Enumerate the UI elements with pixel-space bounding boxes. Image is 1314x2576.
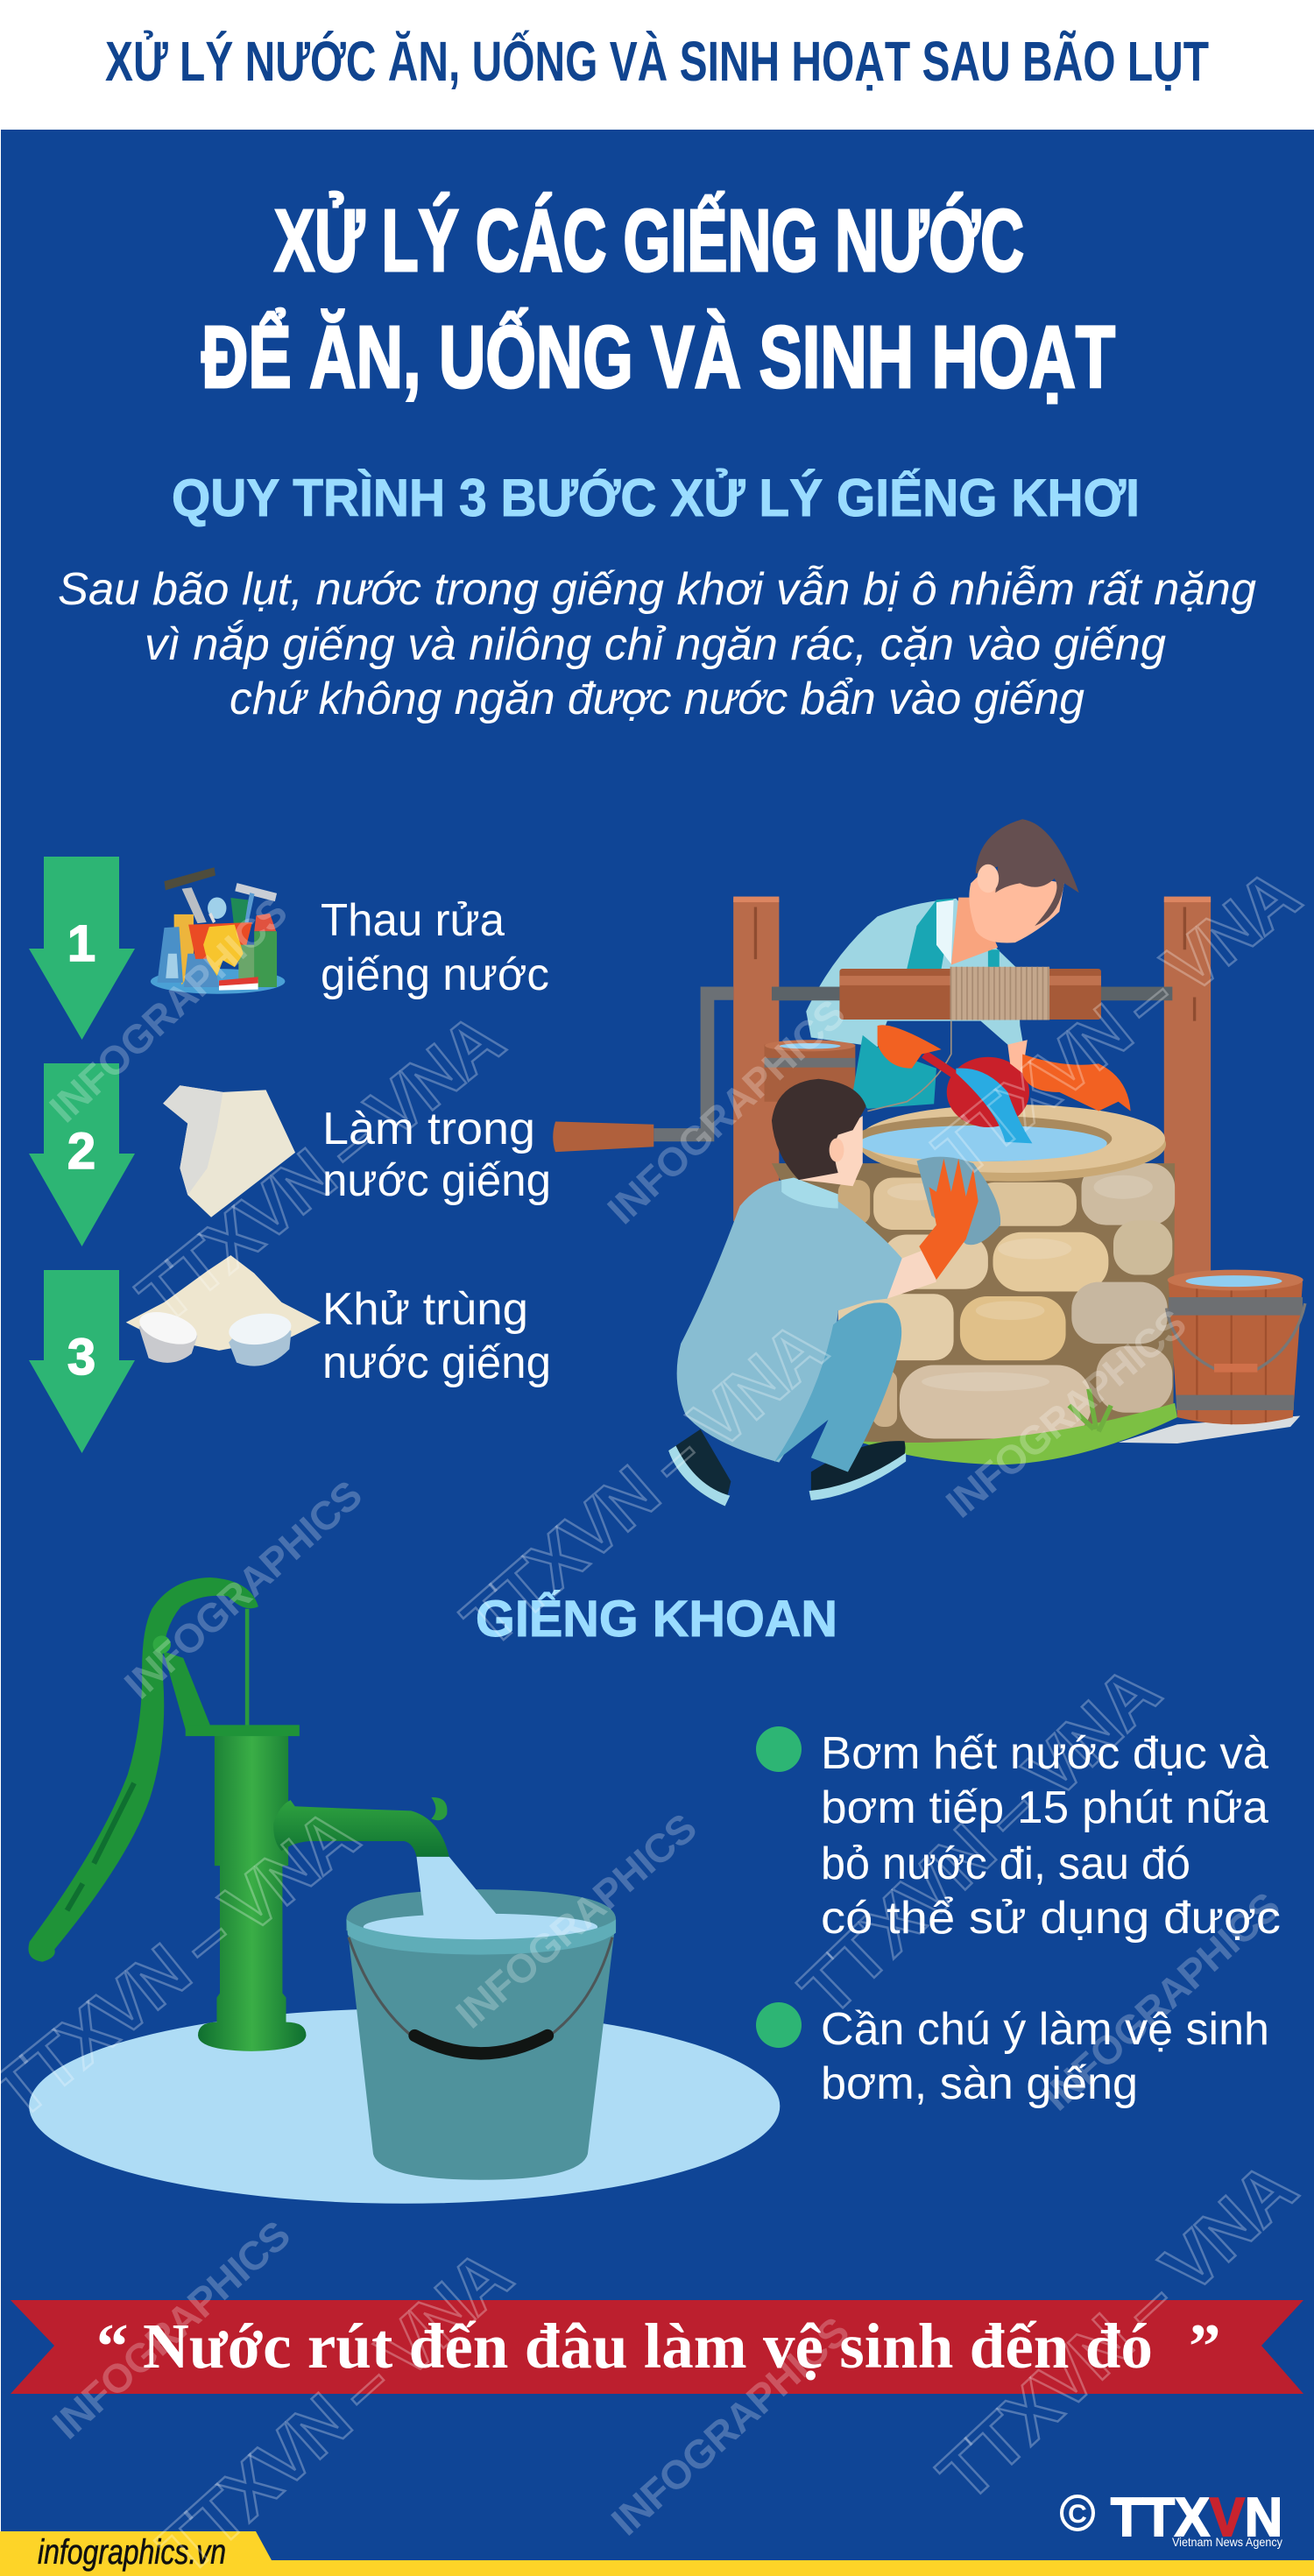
watermark: TTXVN VNA: TTXVN – VNA [922, 2146, 1312, 2516]
watermark: infographics: INFOGRAPHICS [598, 991, 854, 1232]
right bucket [1167, 1270, 1305, 1424]
watermark: infographics: INFOGRAPHICS [603, 2308, 858, 2544]
well posts [733, 897, 1211, 1283]
TTXVN logo: TTXVN [1111, 2488, 1282, 2548]
illustration: hand pump and bucket [28, 1577, 780, 2204]
bullet 2: bơm, sàn giếng [821, 2058, 1138, 2109]
step labels: Khử trùng [322, 1284, 528, 1335]
bullet 1 [756, 1726, 1281, 1944]
crank handle [553, 993, 733, 1152]
step labels: nước giếng [322, 1337, 551, 1388]
step numbers [67, 915, 95, 1386]
watermark: TTXVN VNA: TTXVN – VNA [123, 997, 519, 1339]
step labels: Làm trong [322, 1104, 535, 1154]
arrow 3 [29, 1270, 135, 1453]
watermark: TTXVN VNA: TTXVN – VNA [919, 852, 1314, 1195]
step labels [321, 895, 551, 1388]
watermark: infographics: INFOGRAPHICS [44, 2212, 299, 2447]
step numbers: 1 [67, 915, 95, 972]
well rim and water [854, 1105, 1166, 1182]
watermark: infographics: INFOGRAPHICS [937, 1300, 1195, 1527]
step labels: giếng nước [321, 949, 549, 1000]
bullet 1: Bơm hết nước đục và [821, 1728, 1268, 1779]
red ribbon banner [11, 2300, 1303, 2394]
watermarks [0, 852, 1314, 2576]
watermark: TTXVN VNA: TTXVN – VNA [784, 1649, 1176, 2031]
orange gloves [878, 1025, 1131, 1112]
icon: chlorine powder and tablets [126, 1255, 321, 1366]
ladle with pouring water [924, 1055, 1032, 1143]
arrow 2 [29, 1063, 135, 1246]
watermark: infographics [40, 889, 1289, 2544]
watermark: infographics: INFOGRAPHICS [116, 1471, 371, 1707]
watermark: infographics: INFOGRAPHICS [447, 1804, 705, 2037]
well rope [867, 1021, 951, 1112]
well stones [772, 1163, 1175, 1444]
bucket water [364, 1914, 597, 1940]
illustration: people cleaning a dug well [553, 819, 1305, 1507]
pump column [186, 1725, 306, 2051]
back bucket [765, 1040, 855, 1102]
bullet 2: Cần chú ý làm vệ sinh [821, 2004, 1269, 2055]
TTXVN logo: Vietnam News Agency [1172, 2535, 1282, 2549]
icon: cleaning supplies [151, 867, 285, 994]
man scrubbing the well [668, 1079, 1000, 1507]
watermark: infographics: INFOGRAPHICS [40, 889, 296, 1131]
man at the crank [806, 819, 1079, 1109]
bullet 1: bơm tiếp 15 phút nữa [821, 1782, 1268, 1833]
main title [201, 192, 1115, 406]
bucket back [346, 1889, 616, 1930]
watermark: infographics: INFOGRAPHICS [1034, 1883, 1289, 2119]
bullet 1: có thể sử dụng được [821, 1893, 1281, 1944]
watermark: TTXVN VNA: TTXVN – VNA [447, 1305, 841, 1663]
ground and grass [858, 1389, 1300, 1464]
step numbers: 2 [67, 1123, 95, 1180]
bucket body [346, 1919, 616, 2180]
intro paragraph: Sau bão lụt, nước trong giếng khơi vẫn bị ô nhiễm rất nặng [58, 564, 1256, 615]
windlass drum [772, 967, 1172, 1020]
water puddle [29, 2008, 780, 2204]
arrow 1 [29, 857, 135, 1040]
intro paragraph: vì nắp giếng và nilông chỉ ngăn rác, cặn vào giếng [145, 619, 1166, 670]
TTXVN logo: C [1068, 2500, 1087, 2529]
step labels: Thau rửa [321, 895, 505, 946]
intro paragraph [58, 564, 1256, 724]
pump spout [273, 1797, 449, 1857]
section heading: dug well: QUY TRÌNH 3 BƯỚC XỬ LÝ GIẾNG KHƠI [172, 469, 1140, 527]
step labels: nước giếng [322, 1155, 551, 1206]
yellow footer strip [0, 2531, 1314, 2576]
red ribbon banner: Nước rút đến đâu làm vệ sinh đến đó [143, 2311, 1153, 2382]
watermark: TTXVN VNA [0, 852, 1314, 2576]
intro paragraph: chứ không ngăn được nước bẩn vào giếng [230, 674, 1084, 724]
step arrows [29, 857, 135, 1453]
red ribbon banner: ” [1189, 2311, 1221, 2382]
website label: infographics.vn [38, 2533, 226, 2572]
water stream [417, 1857, 497, 1929]
section heading: drilled well: GIẾNG KHOAN [476, 1591, 837, 1648]
bullet 1: bỏ nước đi, sau đó [821, 1838, 1190, 1889]
icon: alum rock [163, 1085, 295, 1217]
bullet 2 [756, 2002, 1269, 2109]
red ribbon banner: “ [96, 2311, 128, 2382]
step numbers: 3 [67, 1329, 95, 1386]
pump handle and rod [28, 1577, 258, 1962]
bullet list [756, 1726, 1281, 2109]
